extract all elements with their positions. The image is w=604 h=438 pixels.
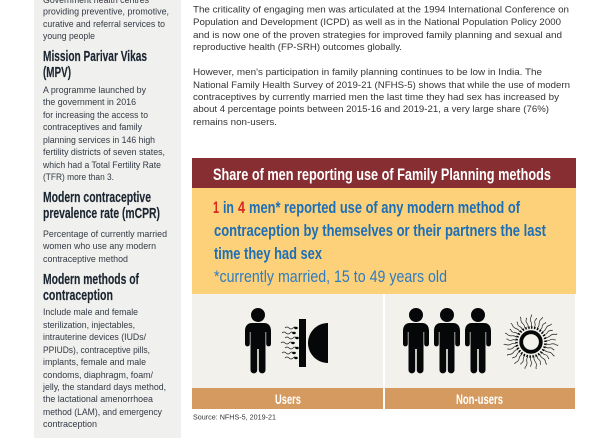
text block: modern methods definition: implants, female and male bbox=[43, 357, 146, 367]
text block: modern methods definition: jelly, the standard days method, bbox=[42, 382, 166, 392]
text block: modern methods definition: condoms, diaphragm, foam/ bbox=[43, 370, 153, 380]
panel: non-users bbox=[385, 294, 575, 388]
text block: Mission Parivar Vikas definition: which had a Total Fertility Rate bbox=[42, 160, 161, 170]
label: Non-users bbox=[385, 388, 575, 409]
panel: glossary sidebar bbox=[34, 0, 181, 438]
callout: 1 in 4 men: men* reported use of any modern method of bbox=[249, 199, 520, 217]
label: Users bbox=[192, 388, 383, 409]
text block: adolescent health clinics description: curative and referral services to bbox=[43, 19, 165, 29]
callout: 1 in 4 men: *currently married, 15 to 49 years old bbox=[214, 268, 447, 286]
text block: Mission Parivar Vikas definition: for increasing the access to bbox=[43, 110, 148, 120]
text block: Mission Parivar Vikas definition: fertility districts of seven states, bbox=[43, 147, 165, 157]
heading: Mission Parivar Vikas: Mission Parivar Vikas bbox=[43, 48, 147, 65]
text block: Mission Parivar Vikas definition: the government in 2016 bbox=[43, 97, 136, 107]
text block: intro paragraph on engaging men bbox=[193, 4, 569, 52]
text block: mCPR definition: contraceptive method bbox=[43, 254, 128, 264]
text block: Mission Parivar Vikas definition: A programme launched by bbox=[43, 85, 146, 95]
text block: paragraph on low participation bbox=[193, 67, 570, 127]
heading: Mission Parivar Vikas: (MPV) bbox=[43, 64, 71, 81]
text block: paragraph on low participation: remains non-users. bbox=[193, 117, 277, 127]
heading: Modern methods of contraception: Modern methods of bbox=[43, 271, 140, 288]
heading: Modern contraceptive prevalence rate: Modern contraceptive bbox=[43, 189, 151, 206]
heading: Modern methods of contraception: contraception bbox=[43, 287, 113, 304]
icon: sperm surrounding egg bbox=[504, 315, 558, 369]
callout: 1 in 4 men: in bbox=[223, 199, 234, 217]
heading: Mission Parivar Vikas bbox=[43, 48, 147, 81]
text block: Mission Parivar Vikas definition: (TFR) more than 3. bbox=[43, 172, 114, 182]
icon: three men bbox=[403, 308, 491, 373]
panel: users bbox=[192, 294, 383, 388]
text block: modern methods definition: method (LAM), and emergency bbox=[43, 407, 162, 417]
text block: paragraph on low participation: However, men's participation in family planning continues to be low in India. The bbox=[193, 67, 542, 77]
text block: Mission Parivar Vikas definition bbox=[42, 85, 165, 182]
icon: man bbox=[245, 308, 271, 373]
text block: adolescent health clinics description: providing preventive, promotive, bbox=[43, 6, 169, 16]
text block: paragraph on low participation: contraceptives by currently married men the last time they had sex has increased by bbox=[193, 92, 559, 102]
text block: modern methods definition: PPIUDs), contraceptive pills, bbox=[43, 345, 150, 355]
callout: 1 in 4 men bbox=[192, 188, 576, 294]
text block: adolescent health clinics description bbox=[43, 0, 169, 41]
callout: 1 in 4 men: 4 bbox=[238, 199, 246, 217]
callout: 1 in 4 men: 1 bbox=[213, 199, 219, 217]
text block: modern methods definition: sterilization, injectables, bbox=[43, 320, 135, 330]
text block: intro paragraph on engaging men: reproductive health (FP-SRH) outcomes globally. bbox=[193, 42, 402, 52]
label: Non-users: Non-users bbox=[456, 391, 503, 407]
text block: Mission Parivar Vikas definition: contraceptives and family bbox=[43, 122, 142, 132]
text block: intro paragraph on engaging men: The criticality of engaging men was articulated at the 1994 International Conference on bbox=[193, 4, 569, 14]
text block: mCPR definition bbox=[42, 229, 167, 264]
text block: paragraph on low participation: about 4 percentage points between 2015-16 and 2019-21, a very large share (76%) bbox=[193, 104, 549, 114]
icon: sperm blocked by condom barrier bbox=[281, 319, 328, 367]
text block: modern methods definition: contraception bbox=[43, 419, 97, 429]
text block: modern methods definition: intrauterine devices (IUDs/ bbox=[43, 332, 146, 342]
label: Users: Users bbox=[275, 391, 301, 407]
text block: adolescent health clinics description: young people bbox=[43, 31, 95, 41]
text block: modern methods definition bbox=[42, 307, 166, 429]
source note: Source: NFHS-5, 2019-21 bbox=[193, 412, 276, 422]
heading: Modern methods of contraception bbox=[43, 271, 140, 304]
text block: mCPR definition: women who use any modern bbox=[42, 241, 156, 251]
callout: 1 in 4 men: time they had sex bbox=[214, 245, 323, 263]
title banner bbox=[192, 158, 576, 188]
text block: intro paragraph on engaging men: Population and Development (ICPD) as well as in the National Population Policy 2000 bbox=[193, 17, 561, 27]
text block: modern methods definition: the lactational amenorrhoea bbox=[43, 394, 154, 404]
heading: Modern contraceptive prevalence rate: prevalence rate (mCPR) bbox=[43, 205, 160, 222]
text block: Mission Parivar Vikas definition: planning services in 146 high bbox=[43, 135, 155, 145]
text block: paragraph on low participation: National Family Health Survey of 2019-21 (NFHS-5) shows that while the use of modern bbox=[193, 80, 570, 90]
text block: intro paragraph on engaging men: and is now one of the proven strategies for improved family planning and sexual and bbox=[193, 30, 562, 40]
heading: Modern contraceptive prevalence rate bbox=[43, 189, 160, 222]
panel: share of men infographic bbox=[192, 158, 576, 409]
text block: mCPR definition: Percentage of currently married bbox=[43, 229, 167, 239]
text block: modern methods definition: Include male and female bbox=[43, 307, 138, 317]
